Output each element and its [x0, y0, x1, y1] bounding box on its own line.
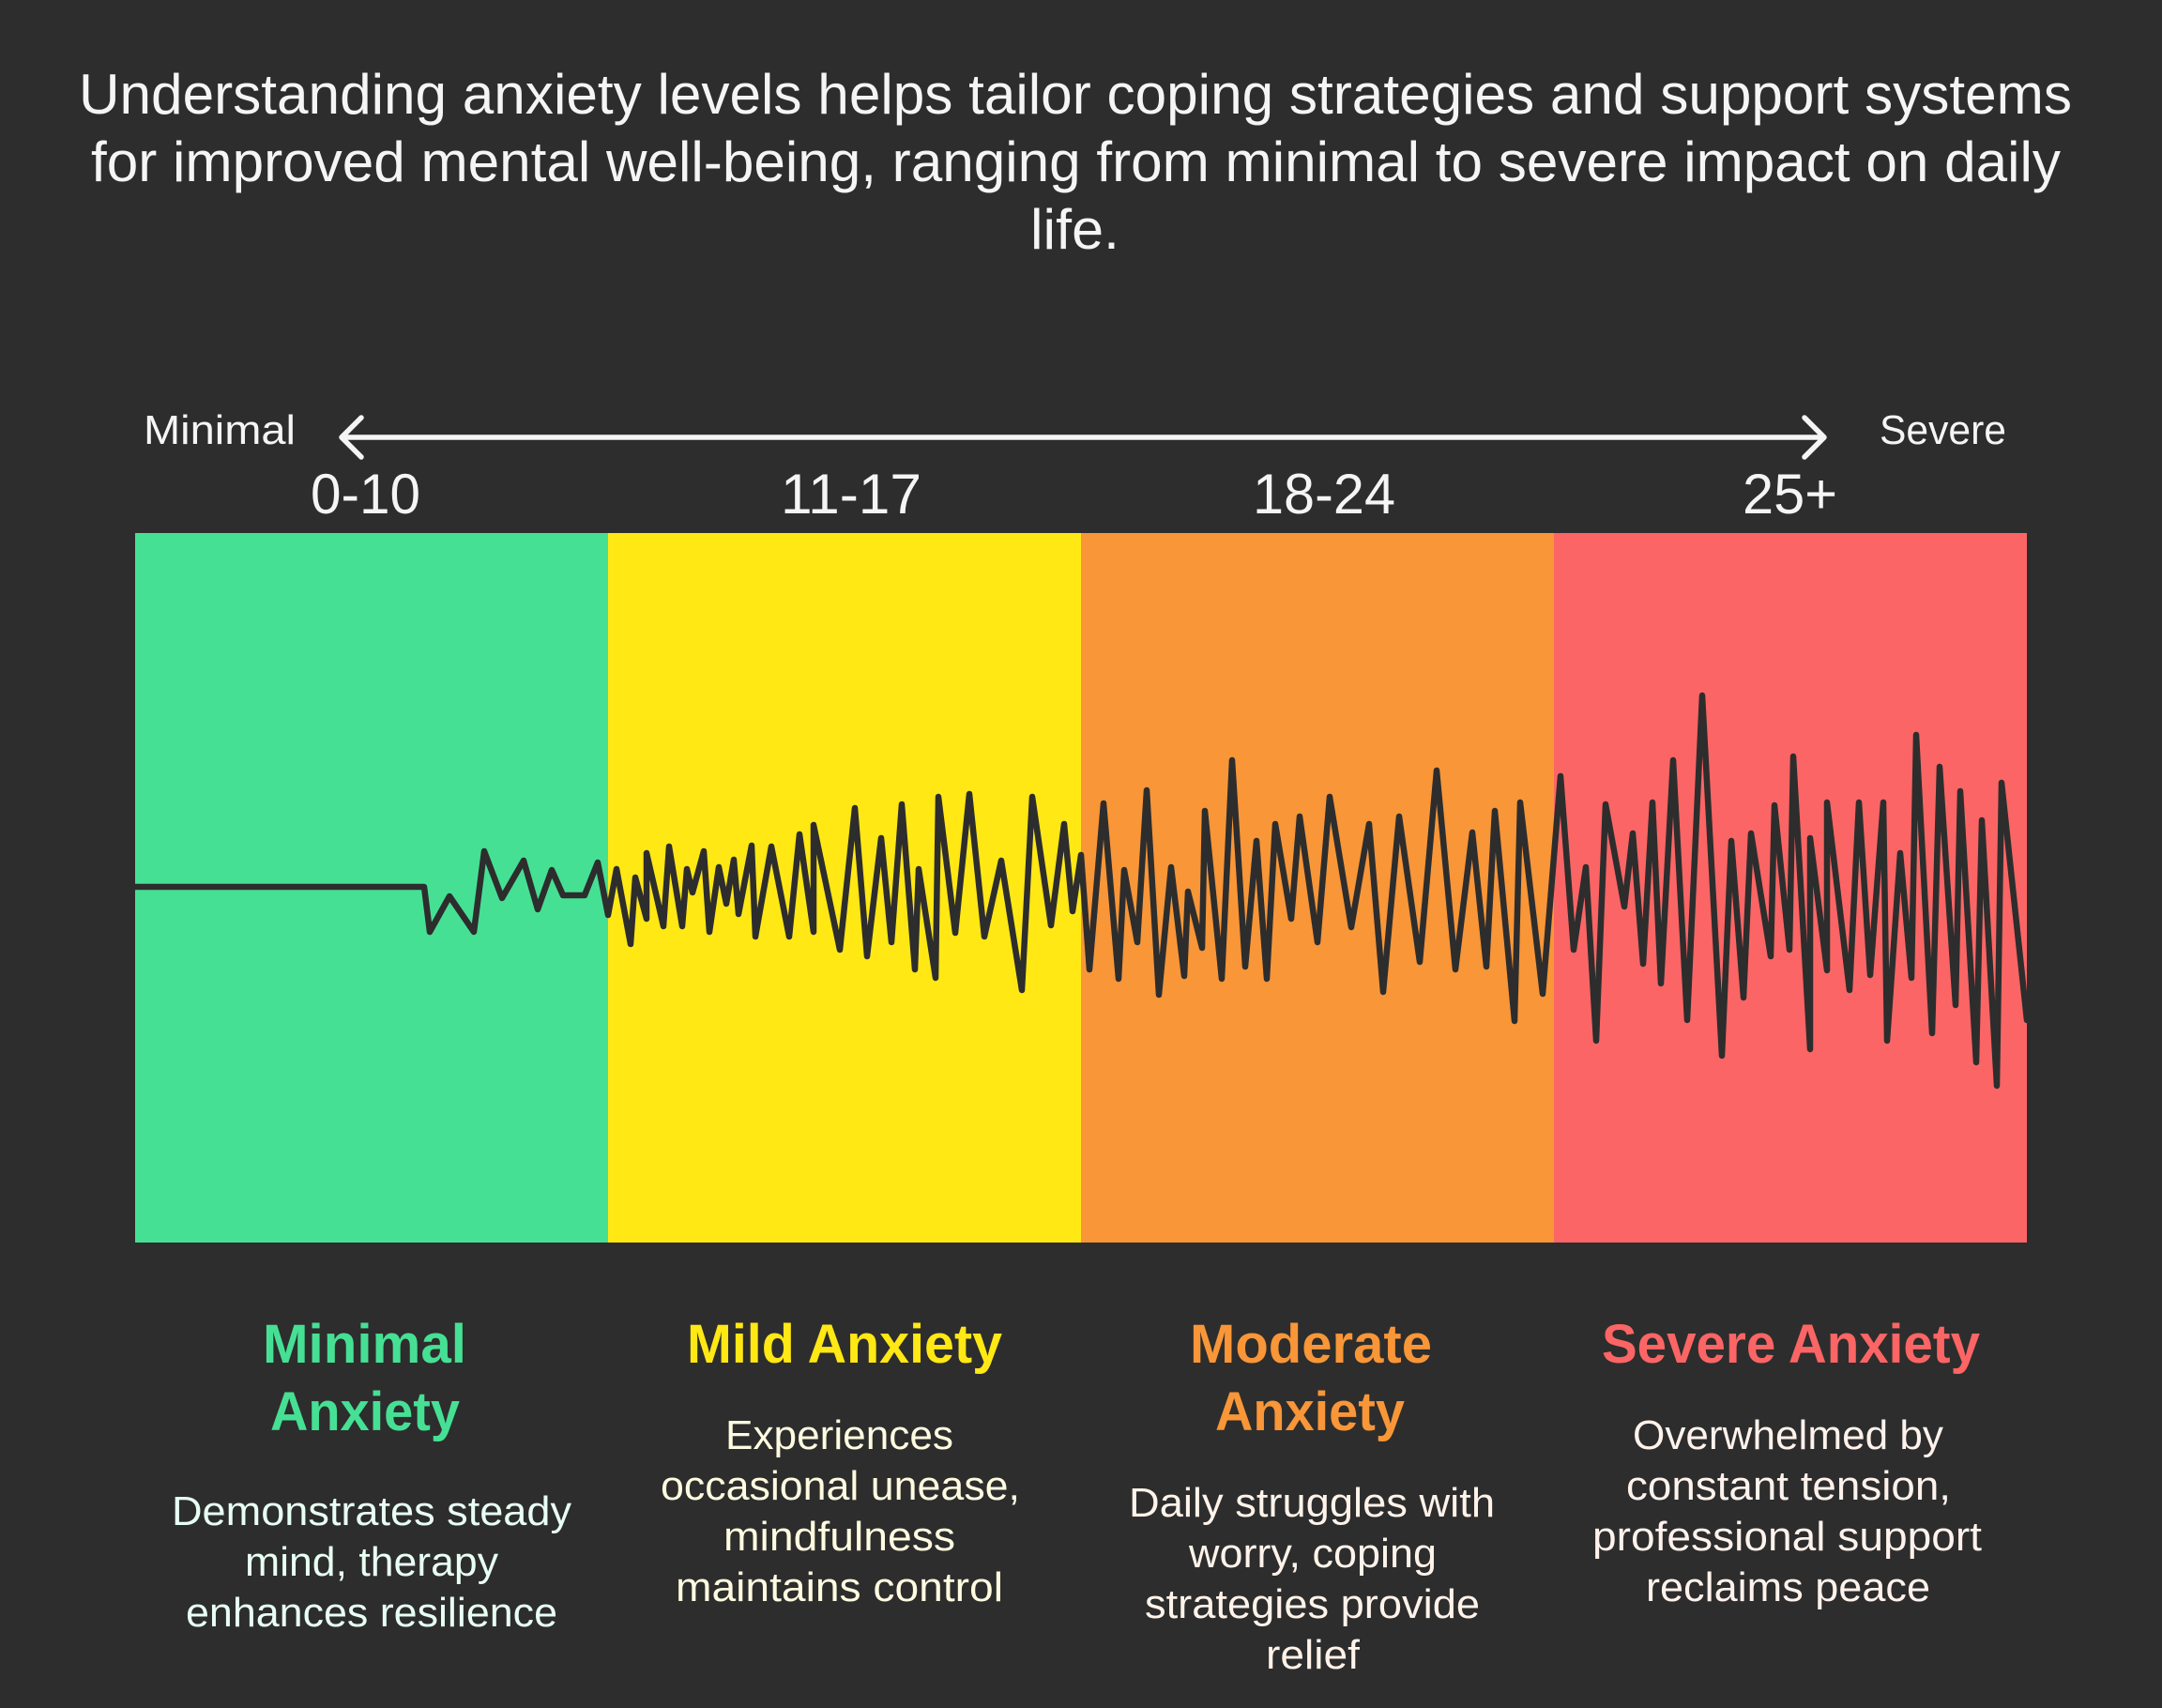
heading: minimal anxiety [263, 1314, 466, 1442]
description: severe anxiety [1592, 1412, 1982, 1610]
panel: moderate anxiety [1129, 1314, 1495, 1678]
description: mild anxiety: Experiences [725, 1412, 953, 1458]
title: life. [1030, 198, 1119, 261]
heading: mild anxiety: Mild Anxiety [687, 1314, 1002, 1375]
description: minimal anxiety: Demonstrates steady [172, 1488, 571, 1534]
band: severe [1554, 533, 2027, 1243]
heading: minimal anxiety: Minimal [263, 1314, 466, 1375]
description: mild anxiety [661, 1412, 1020, 1610]
description: moderate anxiety: relief [1266, 1632, 1361, 1678]
title [79, 63, 2072, 261]
title: Understanding anxiety levels helps tailor coping strategies and support systems [79, 63, 2072, 126]
score range: 0-10: 0-10 [311, 463, 420, 526]
scale label: Minimal: Minimal [144, 407, 296, 453]
panel: minimal anxiety [172, 1314, 571, 1636]
scale label: Severe: Severe [1880, 407, 2006, 453]
band: mild [608, 533, 1081, 1243]
description: mild anxiety: maintains control [676, 1564, 1003, 1610]
description: minimal anxiety [172, 1488, 571, 1636]
heading: moderate anxiety [1190, 1314, 1432, 1442]
panel: mild anxiety [661, 1314, 1020, 1610]
band: moderate [1081, 533, 1554, 1243]
description: moderate anxiety: worry, coping [1188, 1531, 1437, 1577]
score range: 18-24: 18-24 [1253, 463, 1395, 526]
description: mild anxiety: mindfulness [723, 1514, 955, 1560]
description: minimal anxiety: enhances resilience [186, 1590, 557, 1636]
panel: severe anxiety [1592, 1314, 1982, 1610]
band: minimal [135, 533, 608, 1243]
score range: 11-17: 11-17 [781, 463, 921, 526]
heading: severe anxiety: Severe Anxiety [1602, 1314, 1980, 1375]
heading: minimal anxiety: Anxiety [270, 1381, 460, 1442]
description: moderate anxiety: strategies provide [1145, 1581, 1480, 1627]
heading: moderate anxiety: Moderate [1190, 1314, 1432, 1375]
heading: moderate anxiety: Anxiety [1215, 1381, 1405, 1442]
description: severe anxiety: Overwhelmed by [1633, 1412, 1943, 1458]
description: severe anxiety: constant tension, [1626, 1463, 1951, 1509]
score range: 25+: 25+ [1743, 463, 1837, 526]
description: moderate anxiety: Daily struggles with [1129, 1480, 1495, 1526]
arrow: severity scale [342, 418, 1824, 457]
description: severe anxiety: reclaims peace [1646, 1564, 1930, 1610]
description: mild anxiety: occasional unease, [661, 1463, 1020, 1509]
severity spectrum chart [135, 533, 2027, 1243]
waveform line [135, 695, 2027, 1086]
description: minimal anxiety: mind, therapy [245, 1539, 498, 1585]
description: moderate anxiety [1129, 1480, 1495, 1678]
description: severe anxiety: professional support [1592, 1514, 1982, 1560]
title: for improved mental well-being, ranging from minimal to severe impact on daily [91, 130, 2061, 193]
